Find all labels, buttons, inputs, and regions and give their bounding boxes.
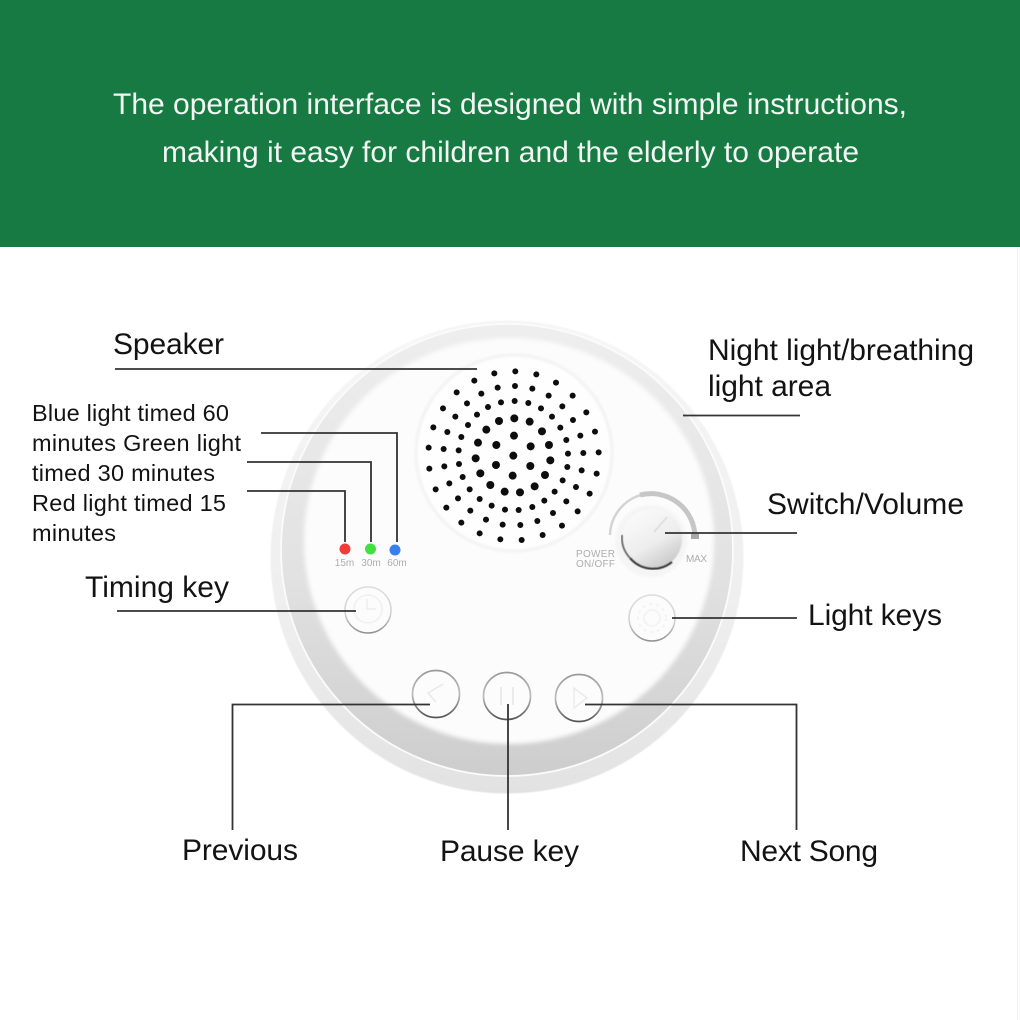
callout: night light — [683, 334, 974, 416]
device shaded band — [281, 324, 733, 776]
page edge line — [1017, 247, 1018, 1020]
callout: timing key: Timing key — [85, 571, 229, 604]
volume knob — [576, 494, 707, 577]
callout: light keys: Light keys — [808, 599, 942, 632]
heading text: making it easy for children and the elderly to operate — [162, 136, 859, 169]
callout: timer lights: Red light timed 15 — [32, 490, 226, 516]
volume knob: POWER — [576, 549, 615, 560]
device: round white noise machine — [270, 320, 744, 794]
button: timing — [345, 587, 391, 633]
speaker grille — [416, 355, 612, 551]
callout: timer lights: minutes — [32, 520, 116, 546]
callout: next song: Next Song — [740, 835, 878, 868]
button: previous — [412, 670, 460, 718]
callout: timer lights — [32, 400, 397, 546]
device outer rim — [270, 320, 744, 794]
timer LEDs — [335, 544, 407, 569]
button: next — [556, 674, 602, 722]
heading text: The operation interface is designed with simple instructions, — [113, 88, 907, 121]
button: light — [629, 595, 675, 641]
callout: timer lights: minutes Green light — [32, 430, 241, 456]
timer LEDs: 60m — [387, 558, 407, 569]
button: pause — [484, 672, 530, 720]
callout: night light: light area — [708, 370, 831, 403]
timer LEDs: 15m — [335, 558, 354, 569]
callout: pause key: Pause key — [440, 835, 579, 868]
callout: timer lights: Blue light timed 60 — [32, 400, 229, 426]
callout: timer lights: timed 30 minutes — [32, 460, 215, 486]
callout: previous: Previous — [182, 834, 298, 867]
volume knob: ON/OFF — [576, 559, 615, 570]
timer LEDs: 30m — [361, 558, 381, 569]
callout: night light: Night light/breathing — [708, 334, 974, 367]
header banner — [0, 0, 1020, 247]
callout: switch and volume: Switch/Volume — [767, 488, 964, 521]
device top face — [304, 338, 714, 744]
callout: next song — [585, 704, 878, 868]
heading text — [113, 88, 907, 169]
callout: speaker: Speaker — [113, 328, 224, 361]
volume knob: MAX — [686, 554, 707, 565]
callout: previous — [182, 704, 430, 867]
